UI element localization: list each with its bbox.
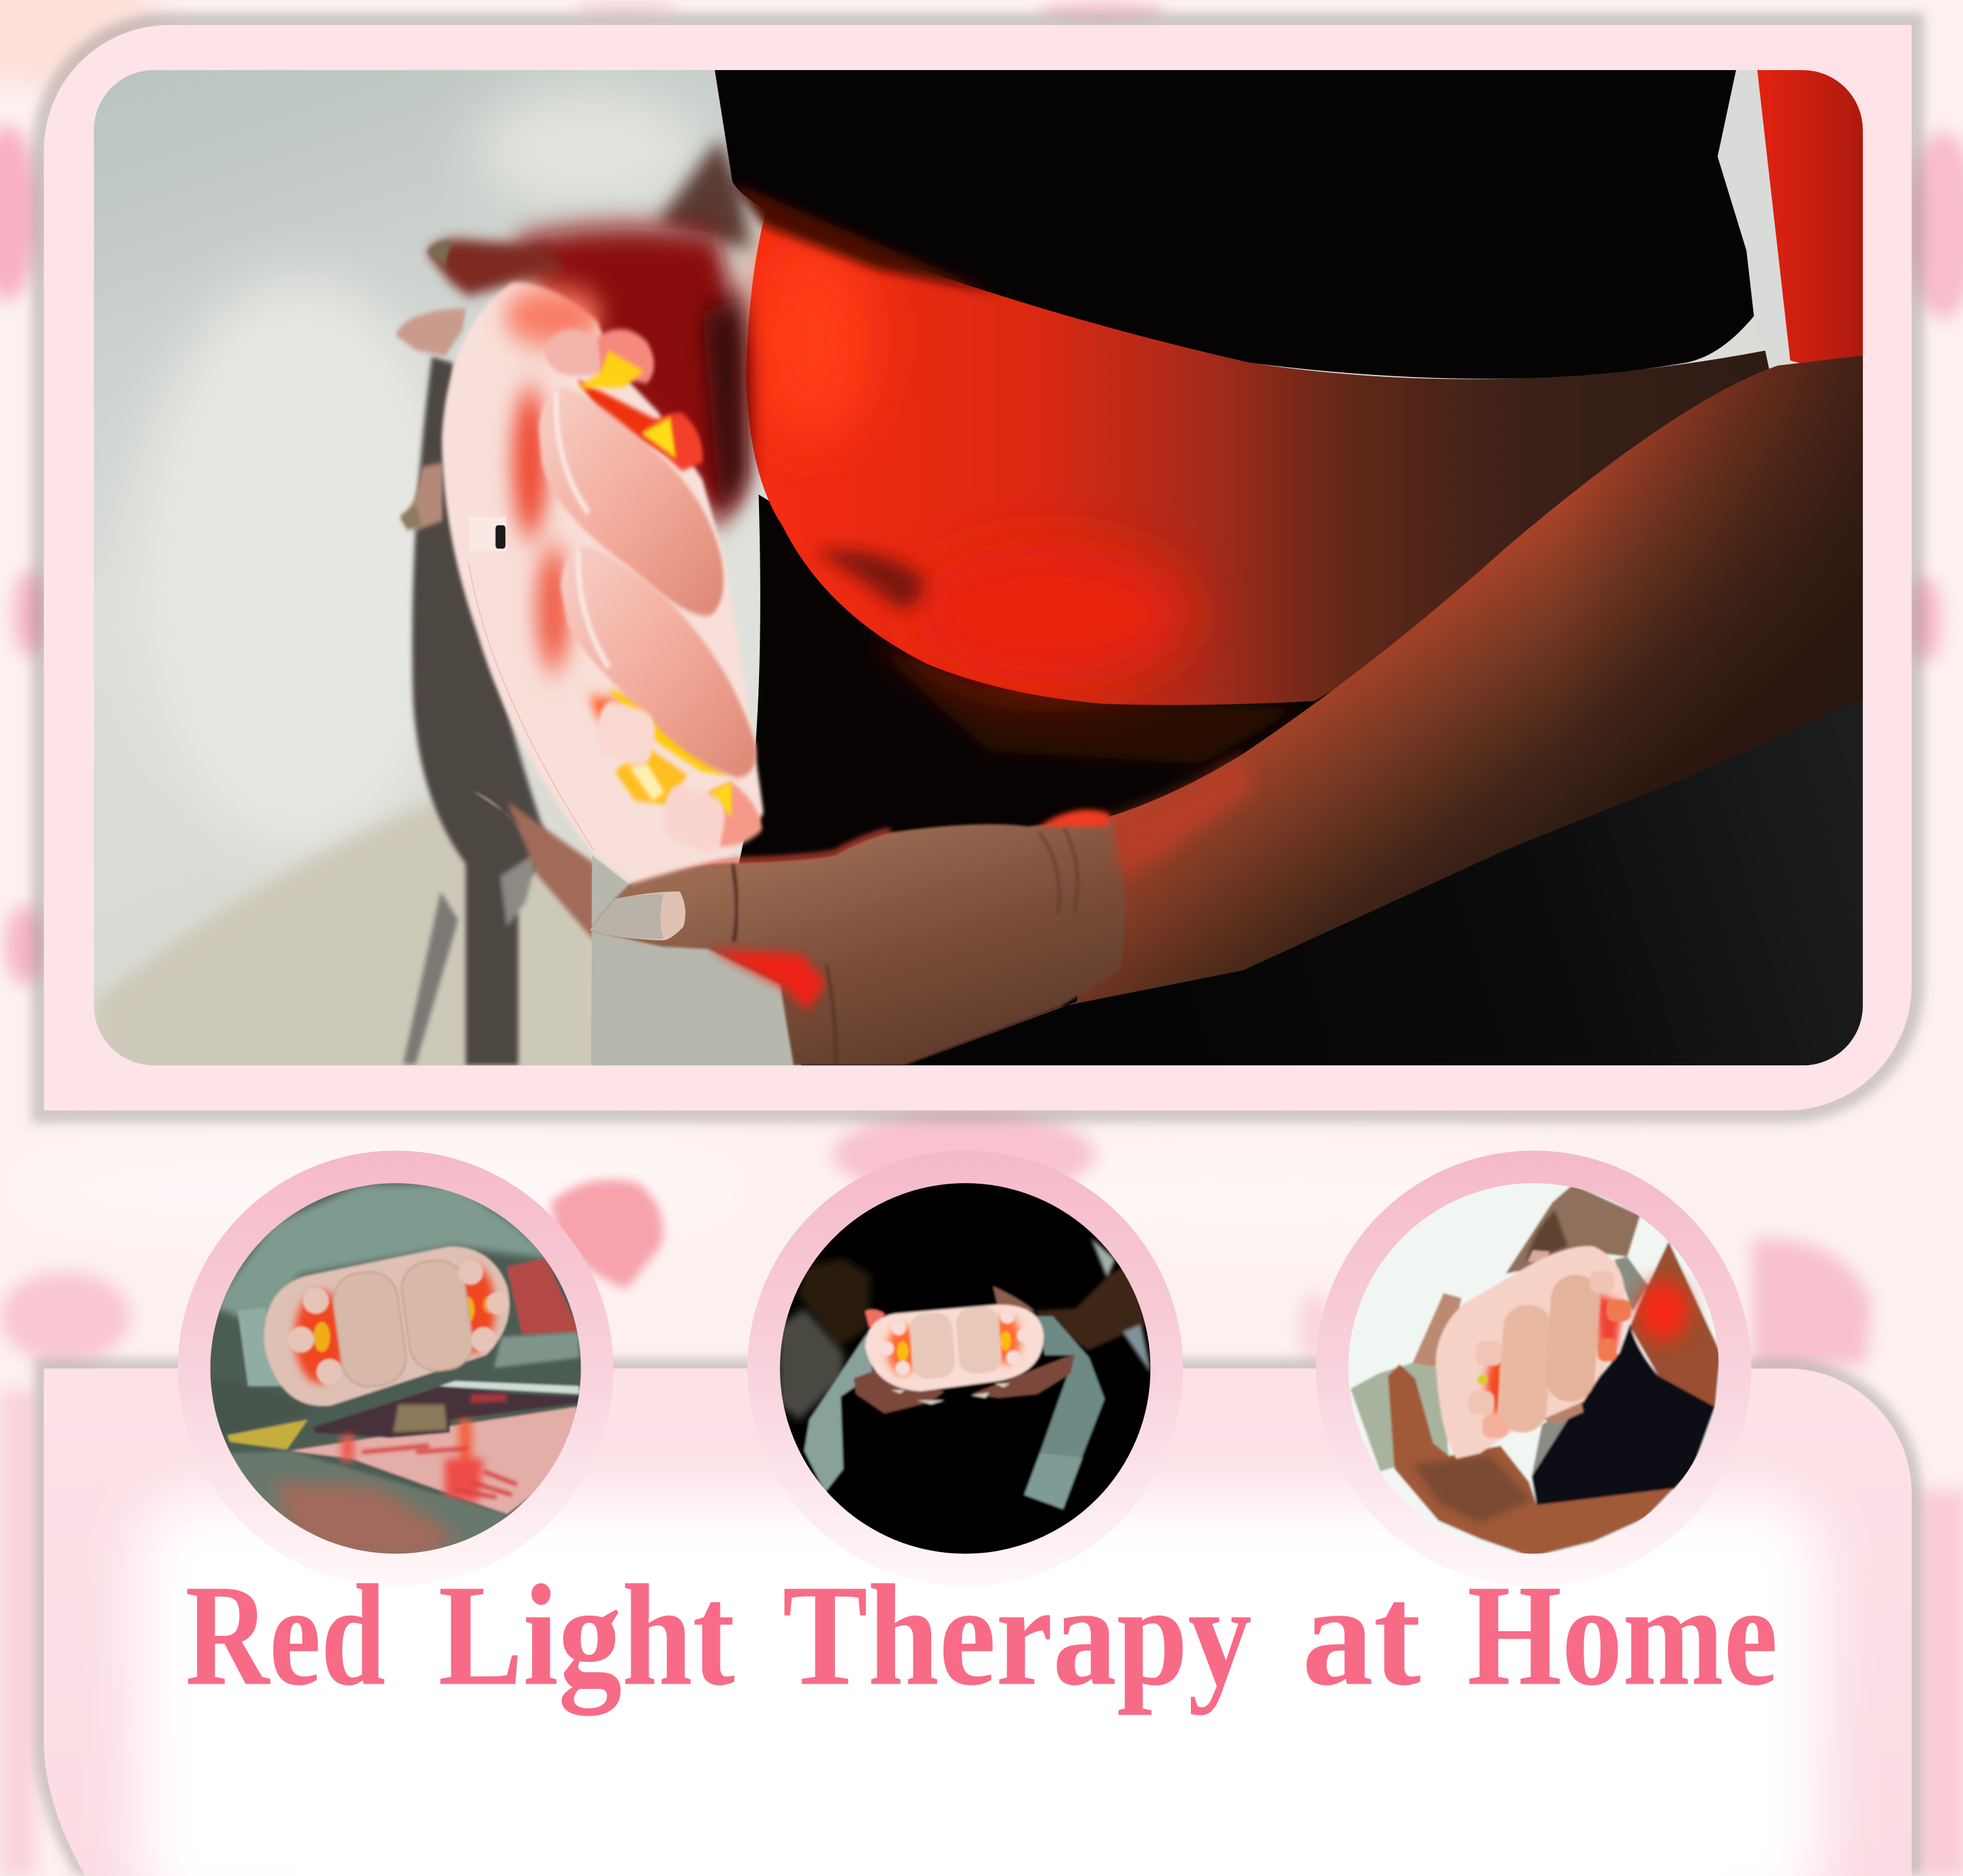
device bbox=[264, 1247, 509, 1406]
nub: lit yellow bbox=[641, 413, 703, 471]
nubs bbox=[1476, 1341, 1502, 1366]
nub: upper pale bbox=[544, 329, 600, 375]
panel: lower text card bbox=[44, 1368, 1912, 1876]
fingers bbox=[1413, 1293, 1462, 1379]
red lit belly bbox=[746, 210, 1784, 705]
strap behind bbox=[1614, 1257, 1648, 1311]
pad 1 bbox=[539, 387, 724, 616]
inner white card bbox=[278, 1753, 1746, 1876]
nails bbox=[891, 1383, 1010, 1404]
strap bbox=[1351, 1363, 1449, 1472]
nub: upper pink with yellow light bbox=[597, 329, 654, 383]
circle ring 2 bbox=[747, 1150, 1183, 1586]
USB port bbox=[469, 517, 506, 551]
title: Light bbox=[438, 1555, 735, 1716]
hands bbox=[853, 1371, 944, 1413]
panel: top photo card bbox=[44, 25, 1912, 1110]
dark waistband bbox=[739, 495, 1352, 876]
device and upper hand, drawn in close-up coordinates bbox=[396, 226, 764, 883]
strap right bbox=[506, 1258, 579, 1334]
fingernail: glitter thumb bbox=[590, 891, 685, 940]
upper hand behind device bbox=[396, 226, 746, 530]
circle photo 1: device on blanket with magazine bbox=[196, 1171, 602, 1577]
device body bbox=[442, 283, 764, 883]
far forearm above hand bbox=[657, 137, 751, 251]
wall background bbox=[94, 70, 1863, 1065]
belt strap behind device bbox=[403, 357, 551, 1065]
buckle bbox=[1024, 1453, 1082, 1509]
hand and thumb bbox=[590, 758, 1252, 1065]
pad 2 bbox=[561, 546, 756, 778]
circle photo 3: hands holding device against torso bbox=[1335, 1171, 1741, 1577]
red lit upper arm bbox=[1756, 63, 1871, 382]
nub: lower pale 1 bbox=[593, 696, 658, 771]
belt strap left bbox=[804, 1334, 873, 1492]
lower hand and arm bbox=[1388, 1364, 1674, 1557]
strap left bbox=[238, 1307, 281, 1386]
pads bbox=[1496, 1303, 1554, 1434]
blanket lower bbox=[227, 1451, 506, 1559]
pads bbox=[330, 1268, 410, 1390]
light gap behind device bbox=[663, 476, 766, 889]
yellow light under pad 2 bbox=[609, 688, 729, 775]
device bbox=[865, 1305, 1044, 1391]
floor bbox=[94, 802, 601, 1077]
device bbox=[1436, 1246, 1625, 1459]
lower finger behind strap bbox=[507, 802, 595, 942]
black top bbox=[1532, 1324, 1715, 1505]
belt strap right bbox=[1035, 1317, 1105, 1459]
title: Red bbox=[185, 1555, 385, 1716]
inner white glow bbox=[137, 1496, 1822, 1876]
title: Therapy bbox=[783, 1555, 1252, 1716]
panel shadow: top photo card bbox=[31, 12, 1924, 1123]
nubs bbox=[303, 1288, 328, 1314]
upper hand bbox=[1506, 1184, 1640, 1273]
grey strap end bbox=[591, 855, 796, 1065]
light halos bbox=[504, 287, 603, 346]
red light on page bbox=[459, 1420, 472, 1466]
title: at bbox=[1302, 1555, 1421, 1716]
circle ring 1 bbox=[178, 1150, 613, 1586]
lower panel shadow bbox=[34, 1358, 1922, 1875]
torso bbox=[1630, 1241, 1720, 1407]
dark leggings bbox=[764, 664, 1863, 1065]
circle photo 2: hands holding device over lap bbox=[766, 1171, 1171, 1577]
title: Home bbox=[1467, 1555, 1778, 1716]
main photo: woman using red light belt on her abdomen bbox=[94, 63, 1871, 1077]
central glow lower bbox=[614, 747, 688, 805]
forearm bbox=[904, 354, 1871, 1065]
nub: lower pale 2 bbox=[660, 781, 728, 857]
nub: lower right with yellow bbox=[708, 782, 762, 847]
black top bbox=[714, 63, 1756, 379]
circle ring 3 bbox=[1316, 1150, 1752, 1586]
magazine bbox=[440, 1381, 579, 1394]
background gap at right bbox=[1718, 70, 1803, 369]
